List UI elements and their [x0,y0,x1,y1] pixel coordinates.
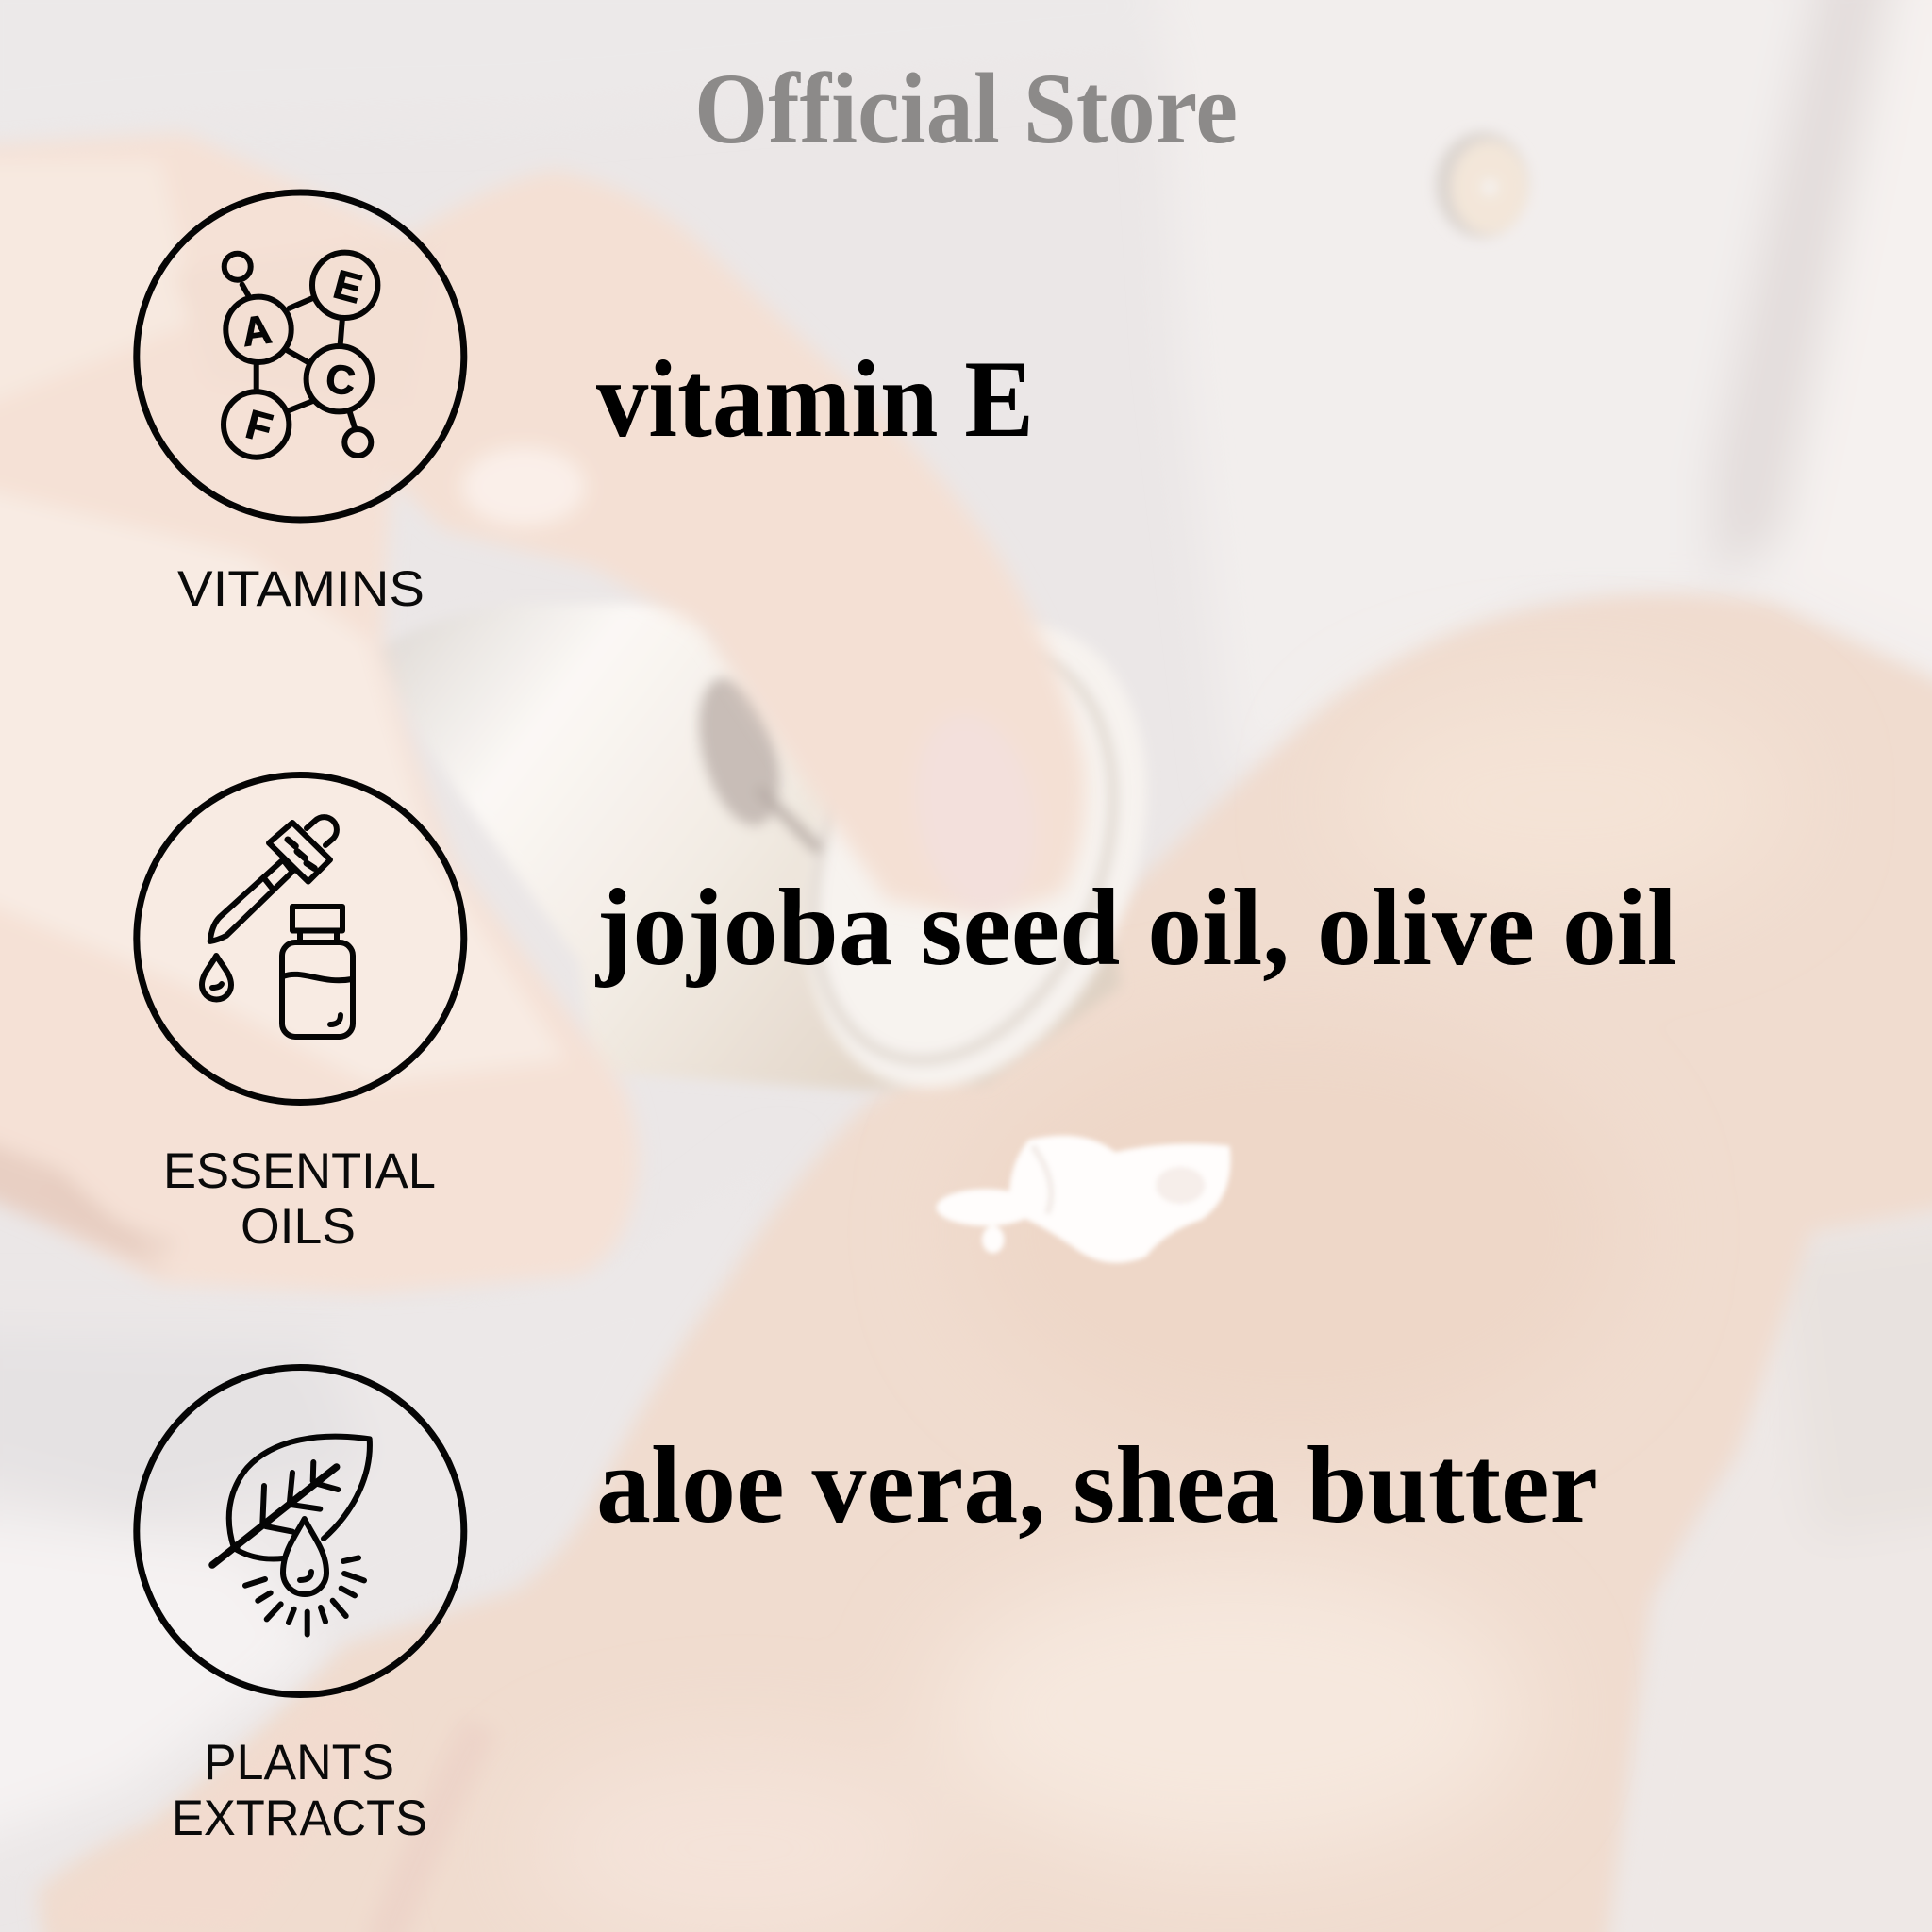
ingredient: aloe vera, shea butter: aloe vera, shea butter [596,1424,1598,1546]
icon: vitamins in circle: E [329,262,367,312]
ingredient: vitamin E: vitamin E [596,339,1034,460]
row 3: plants extracts [137,1368,1598,1846]
label: vitamins: VITAMINS [177,561,425,617]
row 2: essential oils [137,775,1677,1255]
label: essential oils [163,1143,436,1255]
cream swirl on the skin [937,1136,1230,1263]
label: plants extracts [172,1735,427,1846]
right hand [37,594,1932,1932]
icon: dropper and bottle in circle [137,775,464,1102]
label: essential oils: ESSENTIAL [163,1143,436,1199]
row 1: vitamins [137,192,1034,617]
icon: leaf with drop in circle [137,1368,464,1694]
coat button [1436,132,1529,238]
left hand [0,133,1086,1293]
ingredient: jojoba seed oil, olive oil: jojoba seed oil, olive oil [595,867,1677,989]
label: plants extracts: EXTRACTS [172,1790,427,1846]
icon: vitamins in circle: A [239,307,275,356]
icon: vitamins in circle: F [242,402,277,452]
icon: vitamins in circle [137,192,464,520]
label: plants extracts: PLANTS [204,1735,394,1790]
icon: vitamins in circle: C [323,356,358,405]
label: essential oils: OILS [241,1199,356,1255]
title: Official Store [694,54,1238,165]
bottle [370,575,1209,1137]
